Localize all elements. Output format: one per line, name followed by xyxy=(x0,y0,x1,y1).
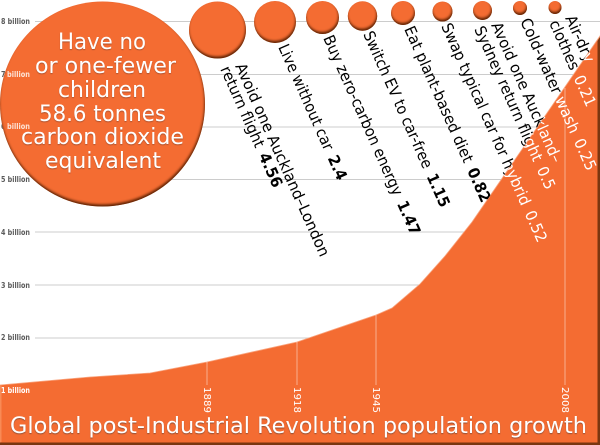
axis label fragments over the bubble xyxy=(7,70,30,131)
action labels in white, over the area: clothes 0.21 xyxy=(545,17,600,110)
bubble text: children xyxy=(58,77,146,103)
label: zero-carbon energy: Buy zero-carbon energy 1.47 xyxy=(319,32,424,238)
action labels in black, above the area xyxy=(216,12,600,259)
title: Global post-Industrial Revolution population growth xyxy=(10,413,587,439)
year markers: 1945 xyxy=(370,387,381,413)
bubble text xyxy=(21,29,184,174)
label: Auckland-London flight: return flight 4.56 xyxy=(216,63,286,190)
action labels in white, over the area: Sydney return flight 0.5 xyxy=(470,23,559,192)
label: cold-water wash: Cold-water wash 0.25 xyxy=(516,15,600,173)
y-axis labels xyxy=(1,17,30,342)
bubble text: 58.6 tonnes xyxy=(39,101,166,127)
year markers xyxy=(201,88,570,413)
label: live without car: Live without car 2.4 xyxy=(274,41,351,183)
y-axis labels: 6 billion xyxy=(1,122,30,131)
chart gridlines xyxy=(35,22,600,338)
y-axis labels: 5 billion xyxy=(1,175,30,184)
y-axis labels: 8 billion xyxy=(1,17,30,26)
action labels in white, over the area: Swap typical car for hybrid 0.52 xyxy=(437,20,551,245)
year markers: 1889 xyxy=(201,387,212,413)
label: Auckland-Sydney flight: Avoid one Auckland– xyxy=(487,19,566,165)
y-axis labels: 4 billion xyxy=(1,228,30,237)
action labels in white, over the area: Avoid one Auckland– xyxy=(487,19,566,165)
label: Auckland-Sydney flight xyxy=(474,24,544,146)
bubble text: equivalent xyxy=(45,148,161,174)
label: Auckland-Sydney flight: Sydney return flight 0.5 xyxy=(470,23,559,192)
bubble: have no or one-fewer children xyxy=(0,2,205,206)
y-axis labels: 3 billion xyxy=(1,281,30,290)
1 billion axis label: 1 billion xyxy=(1,386,30,395)
label: EV to car-free: Switch EV to car-free 1.15 xyxy=(359,28,453,210)
action labels in white, over the area: Air-dry xyxy=(561,12,598,65)
axis label fragments over the bubble: billion xyxy=(7,70,30,79)
bubble text: Have no xyxy=(58,29,146,55)
label: air-dry clothes: clothes 0.21 xyxy=(545,17,600,110)
year markers: 1918 xyxy=(291,387,302,413)
label: plant-based diet: Eat plant-based diet 0.82 xyxy=(400,23,494,205)
label: Auckland-London flight: Avoid one Auckland–London xyxy=(231,60,333,259)
label: air-dry clothes: Air-dry xyxy=(561,12,598,65)
action labels in white, over the area: Cold-water wash 0.25 xyxy=(516,15,600,173)
bubble text: carbon dioxide xyxy=(21,124,184,150)
axis label fragments over the bubble: billion xyxy=(7,122,30,131)
action labels in white, over the area xyxy=(504,52,596,242)
y-axis labels: 2 billion xyxy=(1,333,30,342)
label: hybrid car: Swap typical car for hybrid 0.52 xyxy=(437,20,551,245)
impact bubbles xyxy=(189,1,562,58)
bubble text: or one-fewer xyxy=(35,53,177,79)
y-axis labels: 7 billion xyxy=(1,70,30,79)
year markers: 2008 xyxy=(559,387,570,413)
label: air-dry clothes xyxy=(550,17,590,70)
